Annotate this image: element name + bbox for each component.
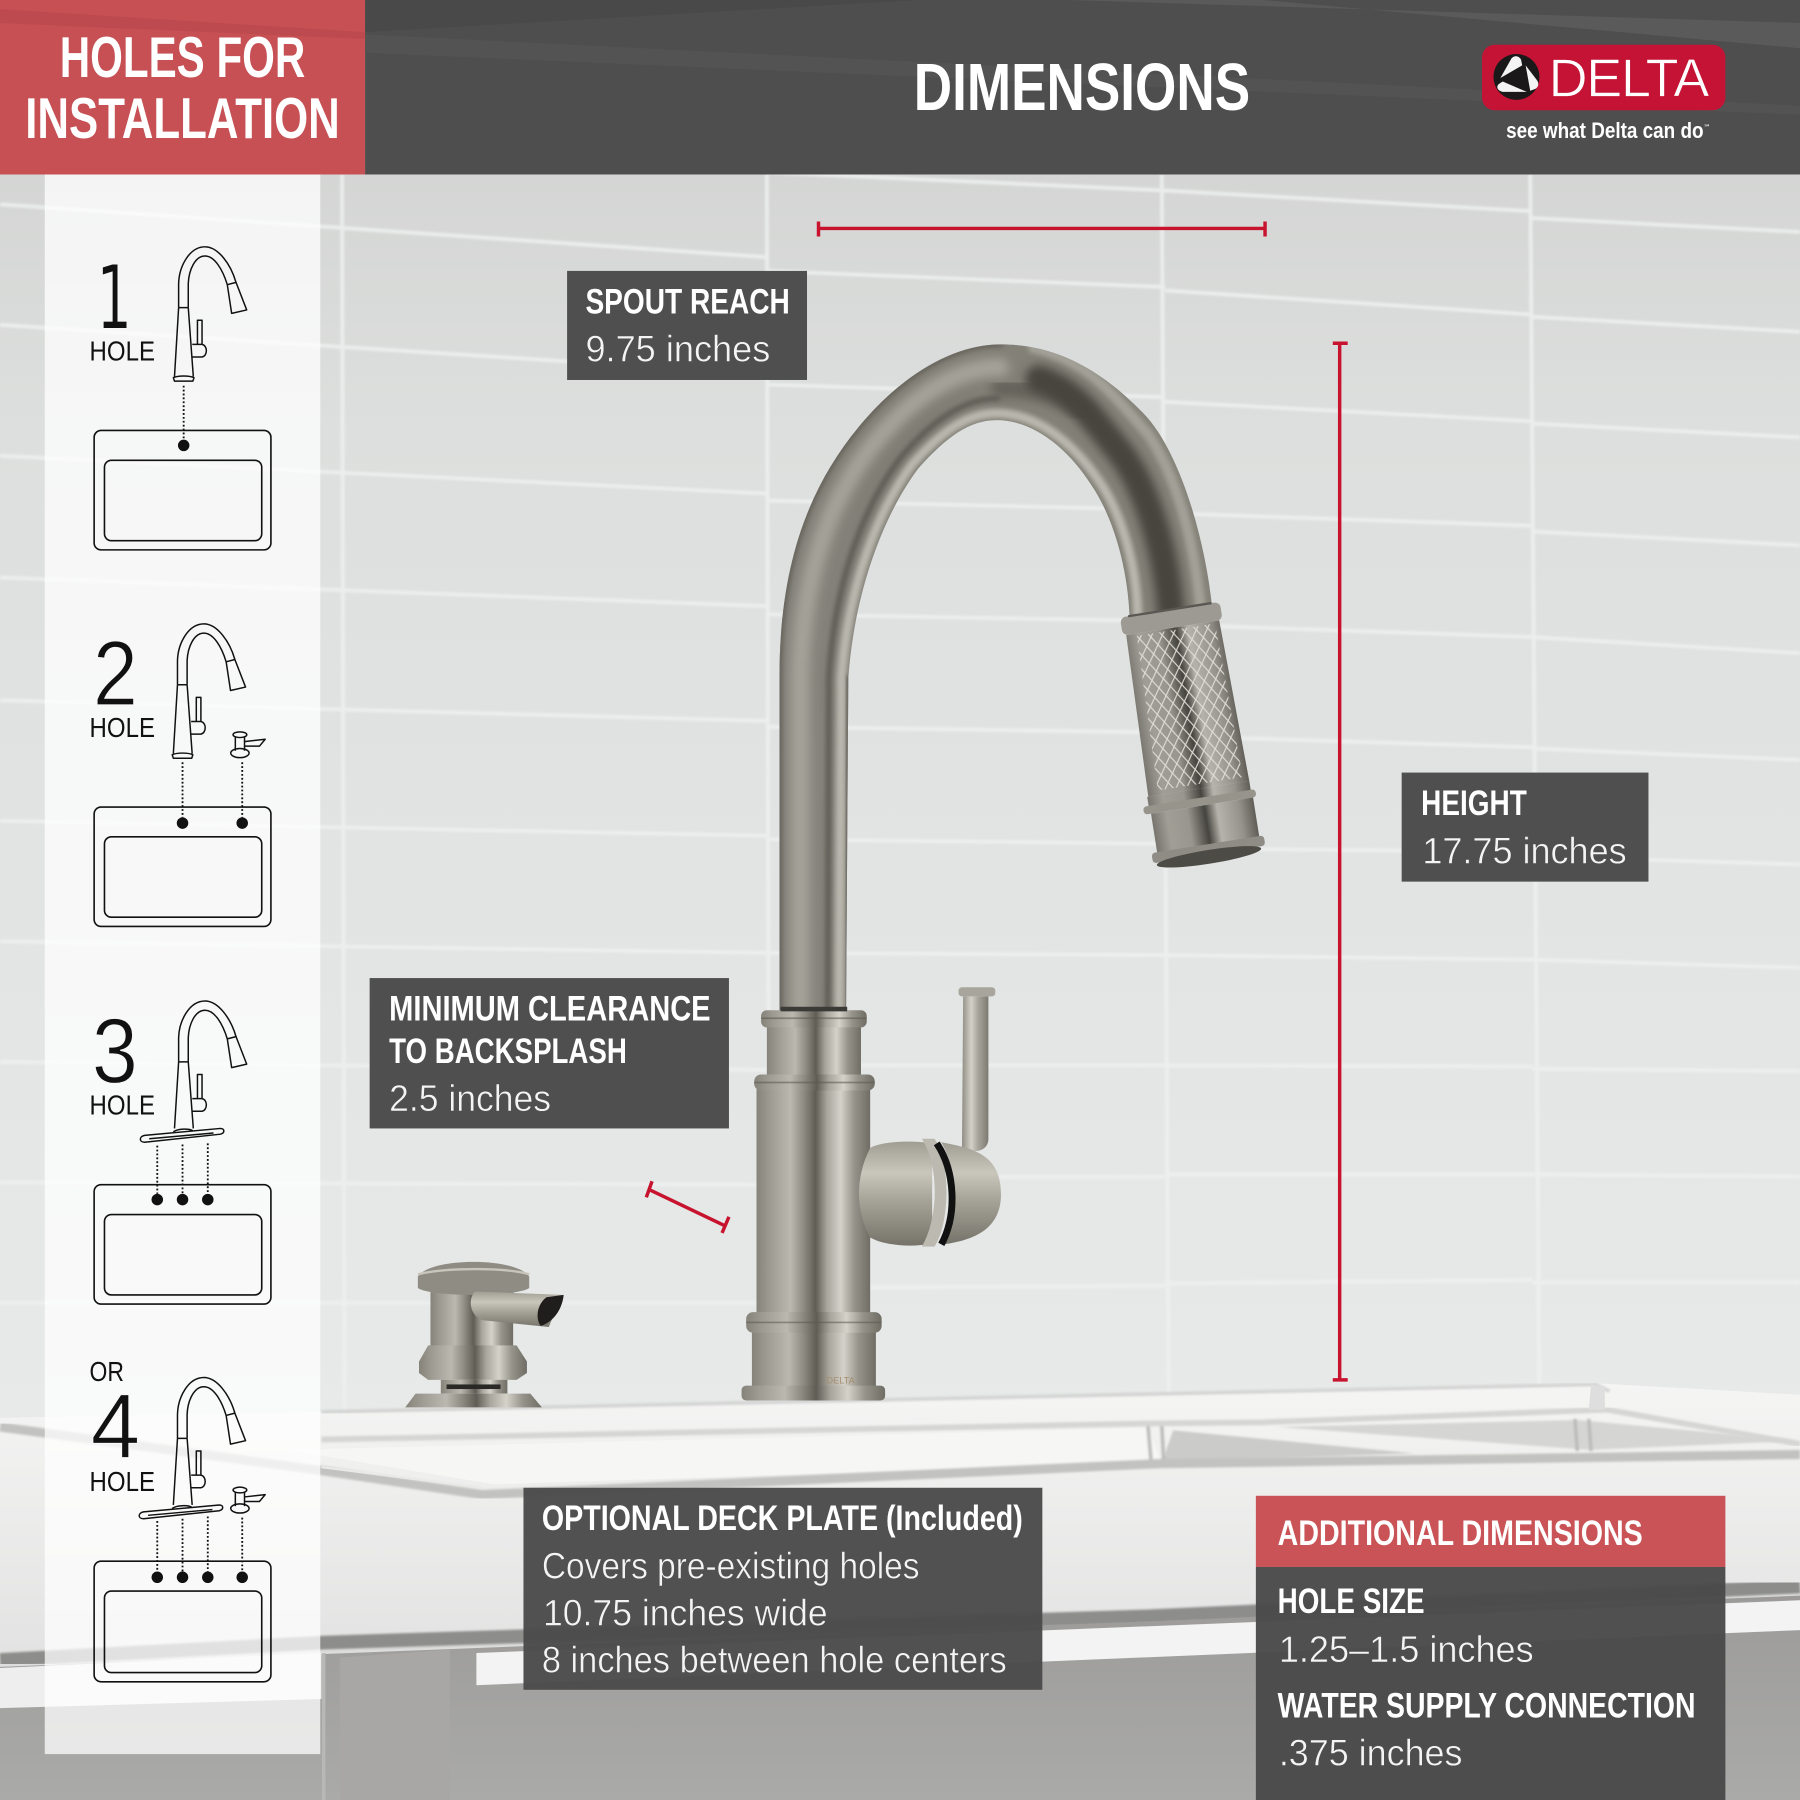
- header bar: [365, 0, 1800, 174]
- option: 1 hole: 1: [96, 246, 132, 349]
- callout: minimum clearance: MINIMUM CLEARANCE: [389, 989, 711, 1029]
- logo: Delta: see what Delta can do: [1506, 118, 1704, 143]
- callout: optional deck plate: Covers pre-existing holes: [542, 1545, 920, 1586]
- option: 2 hole: HOLE: [90, 712, 155, 743]
- background: tiled wall: [0, 172, 1800, 1437]
- option: or 4 hole: HOLE: [90, 1466, 155, 1497]
- callout: height: 17.75 inches: [1422, 830, 1627, 871]
- heading banner: holes for installation: [0, 0, 365, 174]
- option: 2 hole: [90, 623, 271, 926]
- faucet spray head: [1113, 600, 1267, 873]
- callout: height: [1402, 773, 1648, 882]
- callout: spout reach: [567, 271, 807, 380]
- soap dispenser: [405, 1262, 564, 1407]
- callout: minimum clearance: TO BACKSPLASH: [389, 1031, 627, 1071]
- option: or 4 hole: OR: [90, 1356, 124, 1387]
- panel body: [1256, 1567, 1725, 1800]
- callout: minimum clearance: 2.5 inches: [389, 1078, 551, 1119]
- faucet body column: [742, 1007, 885, 1401]
- panel body: 1.25–1.5 inches: [1279, 1629, 1534, 1670]
- faucet body column: DELTA: [827, 1375, 856, 1385]
- panel body: .375 inches: [1279, 1733, 1462, 1774]
- option: or 4 hole: 4: [91, 1376, 140, 1478]
- photo: faucet: [405, 344, 1267, 1407]
- heading: dimensions: DIMENSIONS: [914, 51, 1250, 125]
- heading banner: holes for installation: HOLES FOR: [60, 26, 305, 90]
- option: 1 hole: HOLE: [90, 335, 155, 366]
- panel: installation options: [45, 174, 320, 1754]
- callout: optional deck plate: [523, 1488, 1042, 1690]
- logo: Delta: DELTA: [1549, 48, 1709, 108]
- background: countertop and sink: [0, 1383, 1800, 1800]
- logo: Delta: ℠: [1704, 124, 1711, 132]
- dimension line: backsplash clearance: [646, 1181, 729, 1233]
- dimension line: height: [1333, 343, 1348, 1380]
- callout: optional deck plate: OPTIONAL DECK PLATE (Included): [542, 1498, 1023, 1538]
- panel background: [45, 174, 320, 1754]
- callout: minimum clearance: [370, 978, 729, 1128]
- callout: spout reach: 9.75 inches: [585, 329, 770, 370]
- panel: additional dimensions: [1256, 1496, 1725, 1800]
- panel heading: ADDITIONAL DIMENSIONS: [1278, 1513, 1643, 1553]
- logo: Delta: [1482, 45, 1725, 143]
- callout: spout reach: SPOUT REACH: [585, 281, 790, 321]
- callout: optional deck plate: 10.75 inches wide: [543, 1593, 828, 1634]
- faucet spout tube: [779, 344, 1212, 1016]
- option: 1 hole: [90, 246, 271, 550]
- option: 2 hole: 2: [93, 623, 138, 725]
- panel body: WATER SUPPLY CONNECTION: [1278, 1685, 1696, 1725]
- option: 3 hole: HOLE: [90, 1090, 155, 1121]
- option: 3 hole: 3: [92, 1001, 138, 1103]
- panel heading: [1256, 1496, 1725, 1567]
- callout: height: HEIGHT: [1421, 783, 1527, 823]
- faucet handle: [859, 987, 1001, 1247]
- option: 3 hole: [90, 1001, 271, 1304]
- dimension line: spout reach: [818, 222, 1265, 236]
- heading banner: holes for installation: INSTALLATION: [25, 87, 340, 151]
- option: or 4 hole: [90, 1356, 271, 1682]
- panel body: HOLE SIZE: [1278, 1581, 1425, 1621]
- callout: optional deck plate: 8 inches between hole centers: [542, 1640, 1007, 1681]
